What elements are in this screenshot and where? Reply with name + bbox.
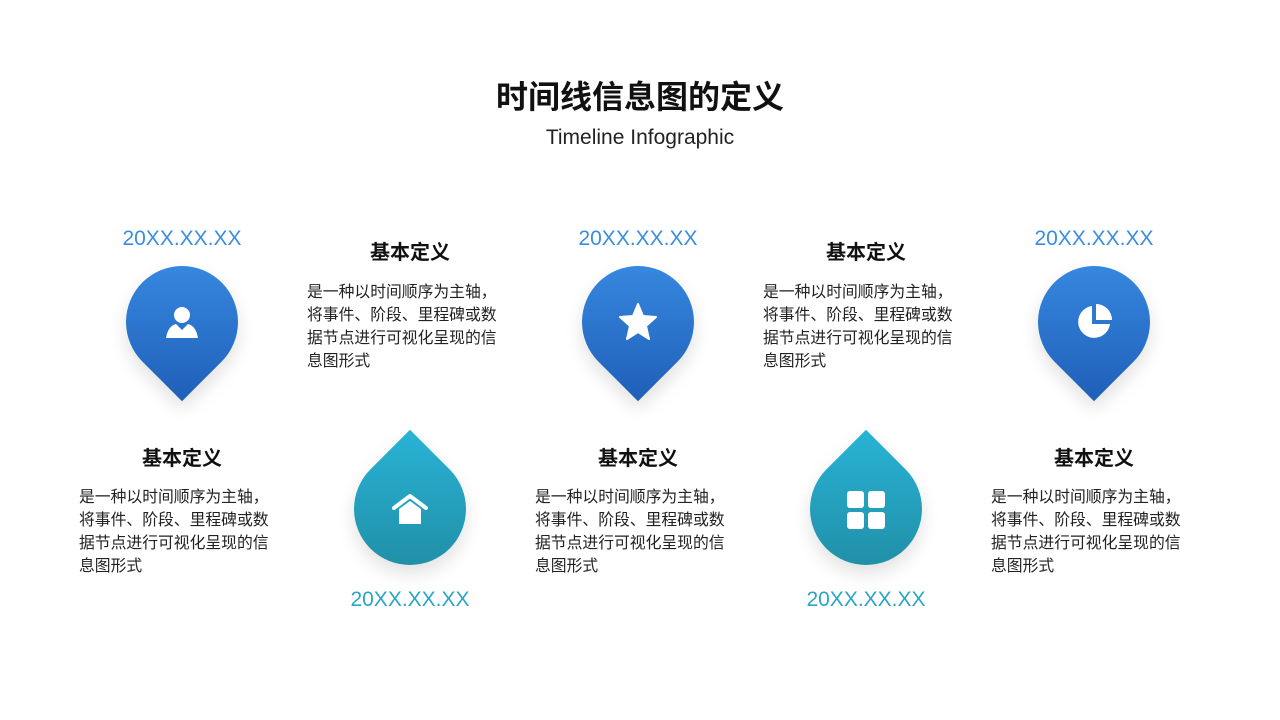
text 4: 是一种以时间顺序为主轴， (763, 284, 953, 301)
text 2: 息图形式 (307, 353, 370, 370)
heading 2: 基本定义 (370, 242, 450, 264)
pin 1 (103, 243, 261, 401)
text 2: 据节点进行可视化呈现的信 (307, 330, 497, 347)
text 2: 将事件、阶段、里程碑或数 (307, 307, 497, 324)
text 3: 将事件、阶段、里程碑或数 (535, 512, 725, 529)
text 4: 据节点进行可视化呈现的信 (763, 330, 953, 347)
heading 1: 基本定义 (142, 448, 222, 470)
text 4 (763, 283, 953, 370)
title: 时间线信息图的定义 (496, 79, 784, 115)
heading 5: 基本定义 (1054, 448, 1134, 470)
text 5: 是一种以时间顺序为主轴， (991, 489, 1181, 506)
text 3: 是一种以时间顺序为主轴， (535, 489, 725, 506)
text 1: 息图形式 (79, 558, 142, 575)
text 1: 据节点进行可视化呈现的信 (79, 535, 269, 552)
pin 3 (559, 243, 717, 401)
text 1 (79, 488, 269, 575)
text 5: 息图形式 (991, 558, 1054, 575)
text 5: 据节点进行可视化呈现的信 (991, 535, 1181, 552)
date 2: 20XX.XX.XX (350, 588, 470, 611)
text 2 (307, 283, 497, 370)
date 3: 20XX.XX.XX (578, 227, 698, 250)
icon: user (166, 307, 198, 338)
text 4: 将事件、阶段、里程碑或数 (763, 307, 953, 324)
date 5: 20XX.XX.XX (1034, 227, 1154, 250)
heading 4: 基本定义 (826, 242, 906, 264)
text 1: 是一种以时间顺序为主轴， (79, 489, 269, 506)
drop 2 (331, 430, 489, 588)
date 1: 20XX.XX.XX (122, 227, 242, 250)
text 5 (991, 488, 1181, 575)
text 3: 息图形式 (535, 558, 598, 575)
text 3: 据节点进行可视化呈现的信 (535, 535, 725, 552)
icon: star (619, 303, 657, 340)
subtitle: Timeline Infographic (546, 126, 734, 149)
drop 4 (787, 430, 945, 588)
icon: home (392, 494, 428, 524)
text 4: 息图形式 (763, 353, 826, 370)
text 3 (535, 488, 725, 575)
icon: grid (847, 491, 885, 529)
text 1: 将事件、阶段、里程碑或数 (79, 512, 269, 529)
date 4: 20XX.XX.XX (806, 588, 926, 611)
heading 3: 基本定义 (598, 448, 678, 470)
text 5: 将事件、阶段、里程碑或数 (991, 512, 1181, 529)
icon: pie (1078, 304, 1112, 338)
text 2: 是一种以时间顺序为主轴， (307, 284, 497, 301)
pin 5 (1015, 243, 1173, 401)
